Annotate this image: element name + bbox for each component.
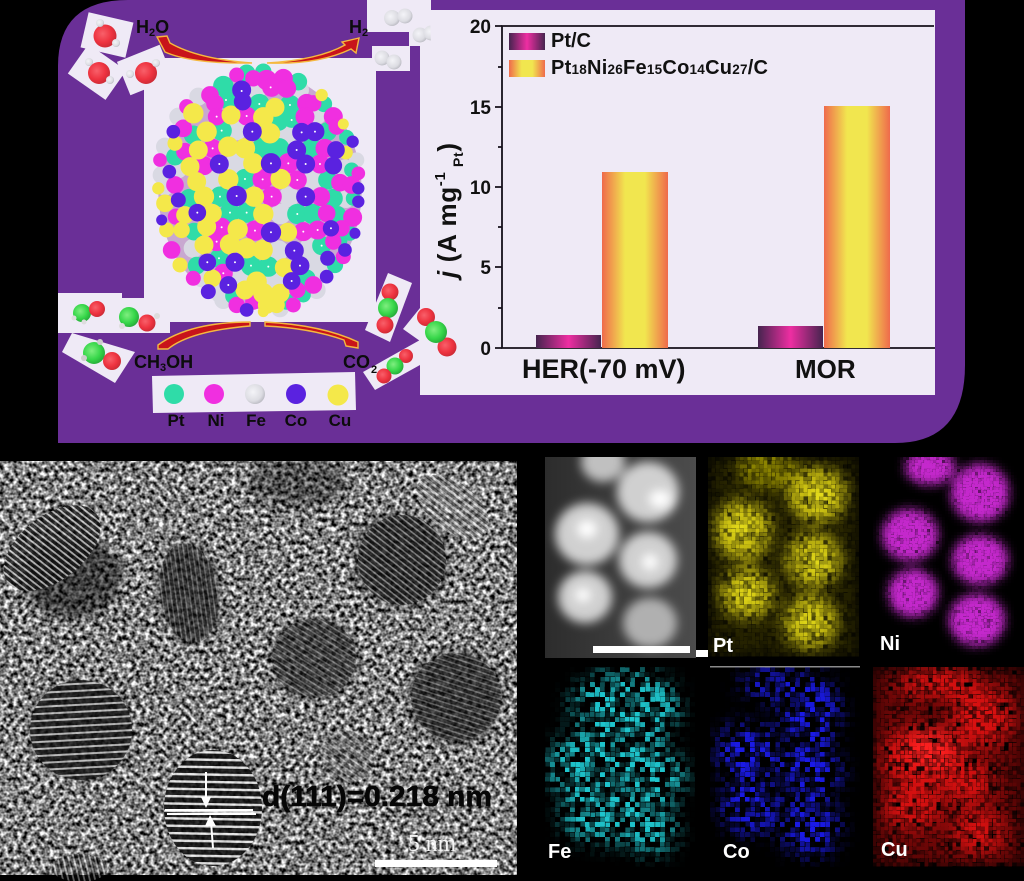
icon: water molecule two	[68, 44, 126, 100]
illustration: high-entropy alloy nanoparticle	[153, 64, 364, 316]
particle: lower centre with lattice fringe	[164, 750, 262, 866]
scale bar: 5 nm: 5 nm	[408, 831, 456, 857]
y-axis title: -1	[432, 172, 449, 186]
icon: methanol molecule three	[62, 333, 135, 383]
y-axis tick labels: 20	[470, 17, 491, 38]
legend: element colours: Pt	[168, 411, 185, 430]
y-axis tick labels: 10	[470, 178, 491, 199]
particle: upper centre	[152, 539, 226, 647]
icon: carbon dioxide molecule one	[365, 273, 412, 342]
y-axis title: Pt	[450, 152, 466, 172]
panel: Ni elemental map	[873, 457, 1017, 655]
icon: water molecule three	[117, 45, 173, 95]
particle: faint lower right	[322, 731, 374, 783]
bars: MOR	[758, 106, 890, 348]
legend: element colours: Fe	[246, 411, 266, 430]
x-axis label: MOR: MOR	[795, 354, 856, 384]
scale bar: 5 nm	[375, 831, 497, 867]
arrow: H2O to H2	[157, 36, 359, 63]
icon: methanol molecule one	[72, 301, 105, 324]
heading: CO2 product: CO	[343, 352, 370, 372]
heading: CH3OH reactant: OH	[166, 352, 193, 372]
icon: water molecule one	[81, 12, 133, 58]
y-axis tick labels	[470, 17, 491, 360]
particle: bottom edge	[52, 854, 108, 881]
label: Pt: Pt	[713, 635, 733, 657]
y-axis title: )	[432, 143, 462, 152]
legend: element colours: Cu	[329, 411, 351, 430]
panel: purple catalysis background	[58, 0, 965, 443]
panel: Cu elemental map	[873, 667, 1024, 866]
particle: top left	[0, 488, 122, 618]
legend: element colours	[152, 372, 356, 430]
label: Ni: Ni	[880, 633, 900, 655]
panel: Co elemental map	[710, 667, 855, 867]
particle: centre	[271, 618, 357, 698]
x-axis label: HER: HER(-70 mV)	[522, 354, 686, 384]
label: Fe: Fe	[548, 841, 571, 863]
heading: H2 product: 2	[362, 27, 368, 39]
particle: lower left	[30, 680, 132, 780]
particle: faint top	[247, 457, 347, 507]
heading: H2O reactant: H	[136, 17, 149, 37]
heading: H2 product: H	[349, 17, 362, 37]
panel: Pt elemental map	[708, 457, 859, 656]
divider under Pt map	[710, 666, 860, 668]
heading: H2O reactant: 2	[149, 27, 155, 39]
legend: element colours: Ni	[208, 411, 224, 430]
legend: element colours: Co	[285, 411, 307, 430]
label: Co: Co	[723, 841, 750, 863]
y-axis tick labels: 15	[470, 98, 491, 119]
scale bar: HAADF	[593, 646, 708, 657]
panel: TEM micrograph	[0, 457, 517, 881]
panel: HAADF image	[545, 457, 696, 658]
arrow: CH3OH to CO2	[158, 322, 358, 349]
legend: Pt18Ni26Fe15Co14Cu27/C	[551, 57, 768, 79]
chart axes	[495, 26, 935, 348]
bars: HER	[536, 172, 668, 348]
label: Cu: Cu	[881, 839, 908, 861]
icon: carbon dioxide molecule two	[417, 308, 456, 356]
icon: methanol molecule two	[119, 307, 160, 332]
icon: carbon dioxide molecule three	[363, 340, 420, 390]
particle: right	[410, 651, 502, 743]
heading: CO2 product: 2	[371, 364, 377, 376]
legend	[509, 30, 768, 79]
panel: nanoparticle backdrop	[58, 0, 431, 333]
heading: CH3OH reactant: 3	[160, 362, 166, 374]
panel: activity bar chart	[403, 10, 935, 395]
icon: hydrogen molecules	[374, 8, 438, 70]
heading: H2O reactant: O	[155, 17, 169, 37]
panel: Fe elemental map	[545, 667, 695, 867]
y-axis title: j (A mg	[432, 187, 462, 278]
particle: upper right	[356, 462, 501, 606]
y-axis tick labels: 5	[480, 258, 491, 279]
legend: Pt/C	[551, 30, 591, 52]
heading: CH3OH reactant: CH	[134, 352, 160, 372]
y-axis tick labels: 0	[480, 339, 491, 360]
label: lattice spacing: d(111)=0.218 nm	[262, 781, 492, 813]
